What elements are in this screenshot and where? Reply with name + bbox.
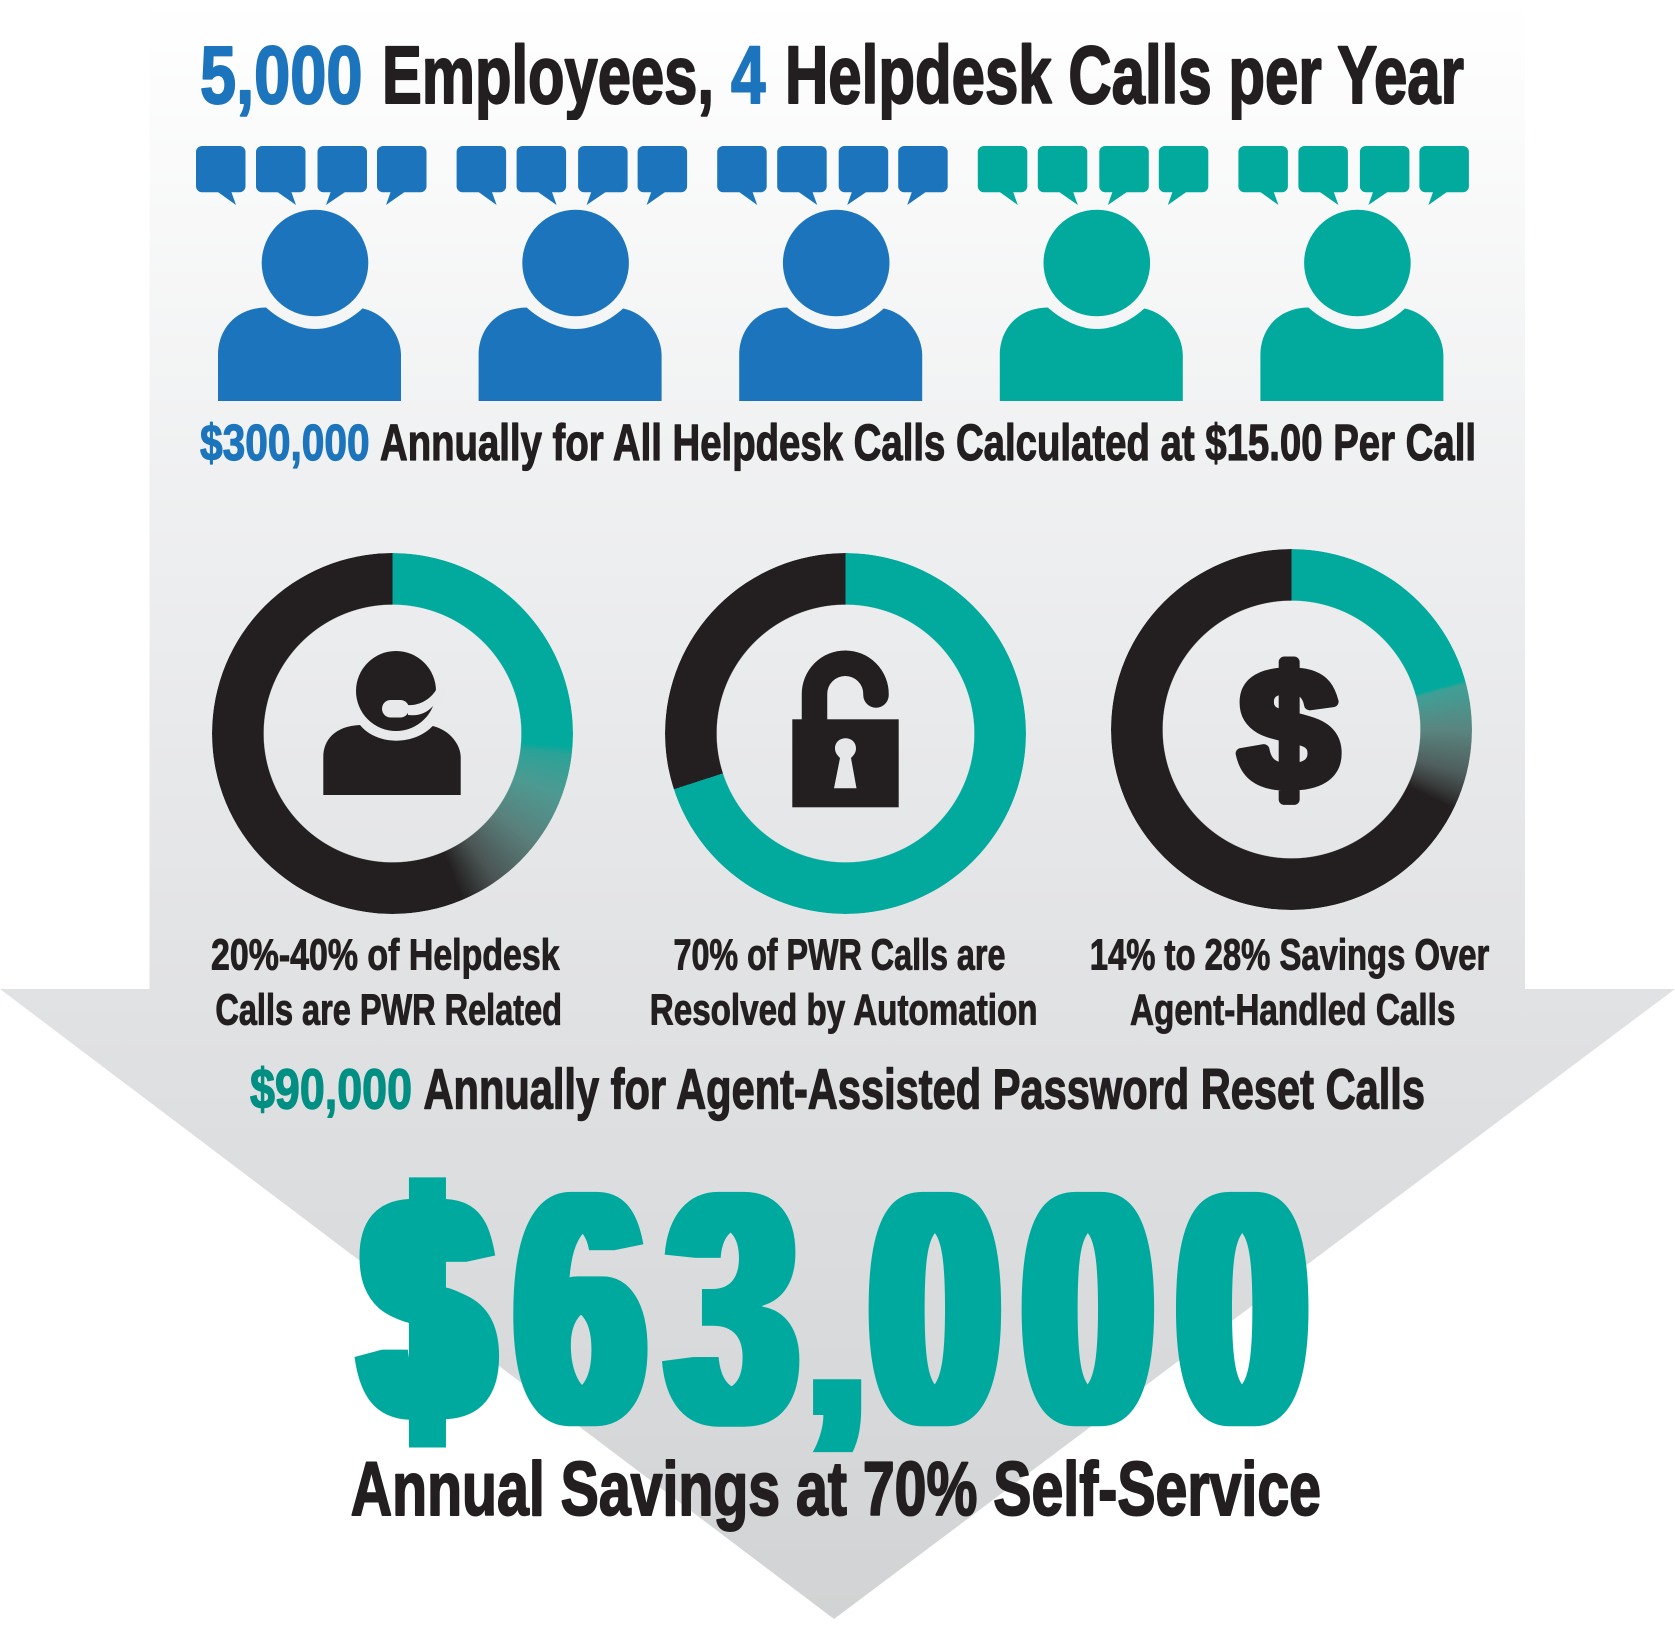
donut captions bbox=[211, 930, 1490, 1035]
person 5 with bubbles bbox=[1238, 146, 1469, 401]
people with speech bubbles: 3 blue, 2 teal bbox=[196, 146, 1469, 401]
icon: helpdesk agent with headset bbox=[323, 651, 461, 795]
person 4 with bubbles bbox=[978, 146, 1208, 401]
caption 1 bbox=[211, 930, 562, 1035]
agent-assisted cost line: $90,000 bbox=[250, 1057, 412, 1121]
donut: automation share bbox=[665, 553, 1026, 914]
icon: open padlock bbox=[792, 650, 899, 808]
annual cost line: $300,000 bbox=[200, 415, 370, 471]
person 2 with bubbles bbox=[457, 146, 687, 401]
title: Employees, bbox=[382, 30, 714, 120]
big savings figure bbox=[354, 1160, 1308, 1460]
donut: PWR share of helpdesk calls bbox=[212, 553, 573, 914]
ring 3 bbox=[1111, 548, 1472, 910]
title: 4 bbox=[731, 30, 766, 120]
title: 5,000 bbox=[200, 30, 362, 120]
caption 2: 70% of PWR Calls are bbox=[674, 930, 1005, 979]
caption 2: Resolved by Automation bbox=[650, 986, 1038, 1035]
person 3 with bubbles bbox=[717, 146, 948, 401]
ring 1 bbox=[212, 552, 573, 914]
donut: savings over agent-handled calls bbox=[1111, 549, 1472, 910]
caption 1: 20%-40% of Helpdesk bbox=[211, 930, 560, 979]
ring 2 bbox=[665, 552, 1026, 914]
caption 3 bbox=[1090, 930, 1489, 1035]
title bbox=[200, 30, 1464, 120]
big savings figure: , bbox=[814, 1198, 860, 1460]
person 1 with bubbles bbox=[196, 146, 426, 401]
caption 1: Calls are PWR Related bbox=[215, 986, 562, 1035]
caption 2 bbox=[650, 930, 1038, 1035]
